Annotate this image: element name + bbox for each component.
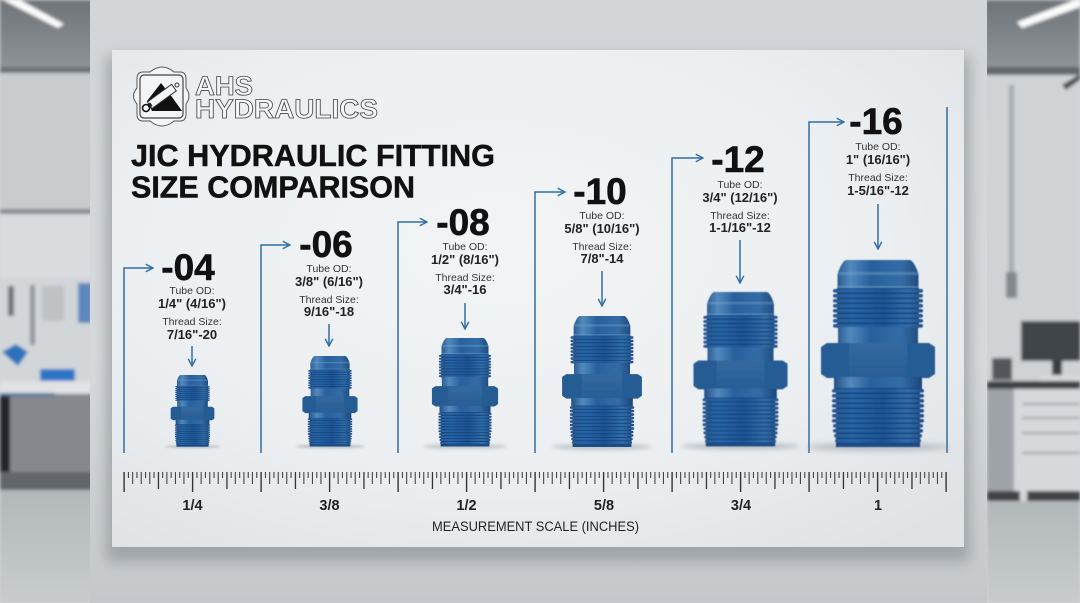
title: JIC HYDRAULIC FITTING <box>131 138 495 173</box>
ruler caption: MEASUREMENT SCALE (INCHES) <box>432 519 639 534</box>
label -10: -10 <box>573 171 627 212</box>
bracket arrow -06 <box>261 245 290 453</box>
ruler labels: 3/8 <box>319 498 340 514</box>
label -12: -12 <box>711 139 765 180</box>
specs -04: Tube OD: <box>169 285 215 297</box>
specs -04: 1/4" (4/16") <box>158 296 226 311</box>
fitting -10 <box>552 316 652 450</box>
down arrow -08 <box>464 303 466 329</box>
fitting -12 <box>681 292 800 450</box>
specs -12: Thread Size: <box>710 210 770 222</box>
title: SIZE COMPARISON <box>131 170 415 204</box>
specs -06: Thread Size: <box>299 294 359 306</box>
specs -12: 1-1/16"-12 <box>709 220 771 235</box>
bracket arrow -10 <box>535 192 565 453</box>
size -12 column <box>672 139 800 453</box>
label -06: -06 <box>299 224 353 265</box>
specs -04 <box>158 285 226 342</box>
ruler labels: 1 <box>874 498 882 514</box>
main panel <box>112 50 964 547</box>
right boundary line <box>946 107 948 453</box>
specs -08: 1/2" (8/16") <box>431 252 499 267</box>
logo: AHS Hydraulics <box>134 67 378 126</box>
specs -16: 1" (16/16") <box>846 152 910 167</box>
specs -16: Thread Size: <box>848 172 908 184</box>
fitting -08 <box>423 338 507 449</box>
down arrow -16 <box>877 204 879 249</box>
specs -12 <box>702 179 778 235</box>
down arrow -12 <box>739 240 741 283</box>
logo wordmark: AHS <box>195 71 253 101</box>
specs -16: Tube OD: <box>855 141 901 153</box>
bracket arrow -04 <box>124 268 153 453</box>
fitting -06 <box>295 356 365 448</box>
bracket arrow -16 <box>809 122 844 453</box>
fitting -16 <box>806 260 950 451</box>
specs -08 <box>431 241 499 297</box>
ruler labels: 3/4 <box>731 498 751 514</box>
fitting -04 <box>165 375 220 448</box>
specs -10: 5/8" (10/16") <box>564 221 640 236</box>
down arrow -10 <box>601 271 603 306</box>
specs -08: 3/4"-16 <box>443 282 487 297</box>
down arrow -06 <box>328 324 330 346</box>
specs -10 <box>564 210 640 266</box>
label -04: -04 <box>161 247 215 288</box>
bracket arrow -12 <box>672 158 703 453</box>
size -16 column <box>806 101 950 453</box>
specs -04: 7/16"-20 <box>167 327 217 342</box>
specs -12: Tube OD: <box>717 179 763 191</box>
label -16: -16 <box>849 101 903 142</box>
measurement ruler <box>123 472 948 492</box>
specs -06 <box>295 263 363 319</box>
logo wordmark: HYDRAULICS <box>195 94 378 124</box>
down arrow -04 <box>191 346 193 366</box>
panel shadow <box>106 56 970 562</box>
specs -16 <box>846 141 910 198</box>
size -06 column <box>261 224 365 453</box>
specs -08: Thread Size: <box>435 272 495 284</box>
logo icon <box>134 67 189 126</box>
specs -10: Tube OD: <box>579 210 625 222</box>
specs -06: 9/16"-18 <box>304 304 354 319</box>
size -04 column <box>124 247 226 453</box>
label -08: -08 <box>436 202 490 243</box>
ruler labels: 5/8 <box>594 498 614 514</box>
bracket arrow -08 <box>398 222 427 453</box>
specs -04: Thread Size: <box>162 316 222 328</box>
specs -12: 3/4" (12/16") <box>702 190 778 205</box>
ruler labels: 1/2 <box>456 498 477 514</box>
specs -10: 7/8"-14 <box>580 251 624 266</box>
specs -10: Thread Size: <box>572 241 632 253</box>
ruler labels <box>182 498 882 514</box>
title <box>131 138 495 204</box>
specs -06: 3/8" (6/16") <box>295 274 363 289</box>
specs -16: 1-5/16"-12 <box>847 183 909 198</box>
logo wordmark <box>195 71 378 124</box>
specs -06: Tube OD: <box>306 263 352 275</box>
specs -08: Tube OD: <box>442 241 488 253</box>
size -08 column <box>398 202 507 453</box>
ruler labels: 1/4 <box>182 498 203 514</box>
size -10 column <box>535 171 652 453</box>
